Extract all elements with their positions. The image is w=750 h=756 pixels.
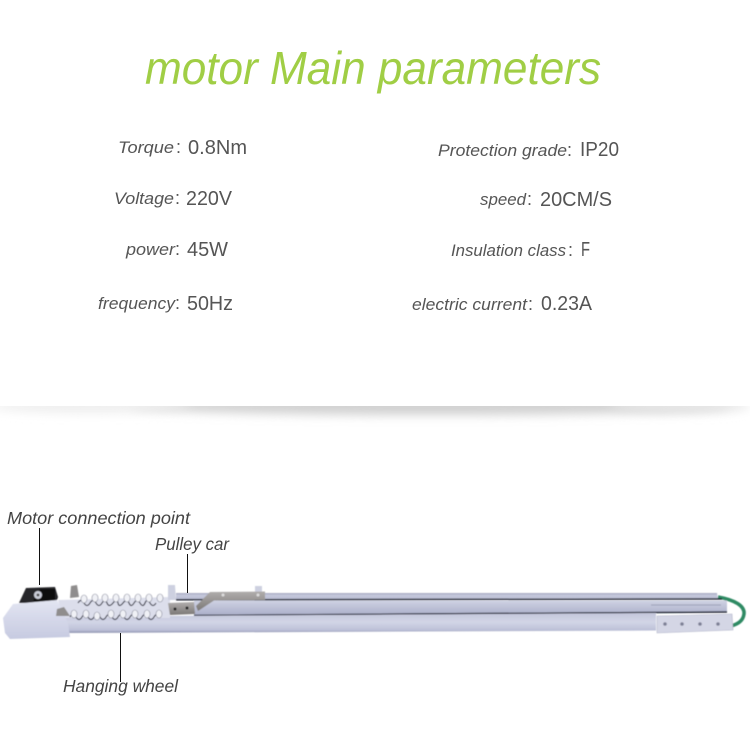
hanging wheels: lower row [70, 610, 162, 620]
parameter: torque: Torque [118, 138, 174, 157]
parameter: electric current: : [528, 294, 533, 314]
callout: hanging wheel: Hanging wheel [63, 676, 179, 696]
parameter: frequency: frequency [98, 294, 177, 313]
parameter: protection grade: : [567, 140, 572, 160]
parameter: speed: 20CM/S [540, 189, 612, 211]
title: motor Main parameters [145, 42, 601, 94]
motor housing [3, 600, 70, 639]
parameter: voltage: 220V [186, 188, 233, 210]
panel shadow [4, 406, 745, 420]
parameter: torque: : [176, 137, 181, 157]
callout: motor connection point: Motor connection point [7, 508, 191, 528]
end clips [56, 585, 79, 616]
motor connection block [19, 587, 58, 603]
parameter: torque [118, 137, 247, 159]
green belt [718, 597, 744, 626]
parameter: power [125, 239, 228, 261]
parameter: electric current: 0.23A [541, 293, 593, 315]
parameter: voltage: : [175, 188, 180, 208]
parameter: electric current: electric current [412, 295, 528, 314]
parameter: voltage [114, 188, 233, 210]
parameter: power: power [125, 240, 176, 259]
callout: pulley car [155, 534, 230, 593]
callout: pulley car: Pulley car [155, 534, 230, 554]
parameter: speed [480, 189, 612, 211]
parameter: speed: : [527, 189, 532, 209]
top rail [176, 593, 718, 600]
parameter: power: 45W [187, 239, 228, 261]
parameter: protection grade: Protection grade [438, 141, 567, 160]
parameter: frequency: : [175, 293, 180, 313]
end plate with screws [657, 614, 733, 633]
bottom rail [64, 613, 656, 633]
callout: hanging wheel [63, 633, 179, 696]
parameter: power: : [175, 239, 180, 259]
hanging wheels: upper row [78, 594, 163, 606]
parameter: voltage: Voltage [114, 189, 174, 208]
parameter: speed: speed [480, 190, 527, 209]
parameter: protection grade: IP20 [580, 139, 619, 161]
parameter: insulation class: F [581, 239, 590, 261]
parameters: right column [412, 139, 619, 315]
parameter: torque: 0.8Nm [188, 137, 247, 159]
pulley car [168, 585, 265, 615]
parameter: frequency: 50Hz [187, 293, 233, 315]
parameter: protection grade [438, 139, 619, 161]
parameter: frequency [98, 293, 233, 315]
middle rail [194, 600, 727, 616]
parameters: left column [98, 137, 247, 315]
parameter: electric current [412, 293, 593, 315]
parameter: insulation class: : [568, 240, 573, 260]
curtain track product illustration [3, 585, 744, 639]
parameter: insulation class: Insulation class [451, 241, 566, 260]
wheel channel [58, 597, 170, 618]
